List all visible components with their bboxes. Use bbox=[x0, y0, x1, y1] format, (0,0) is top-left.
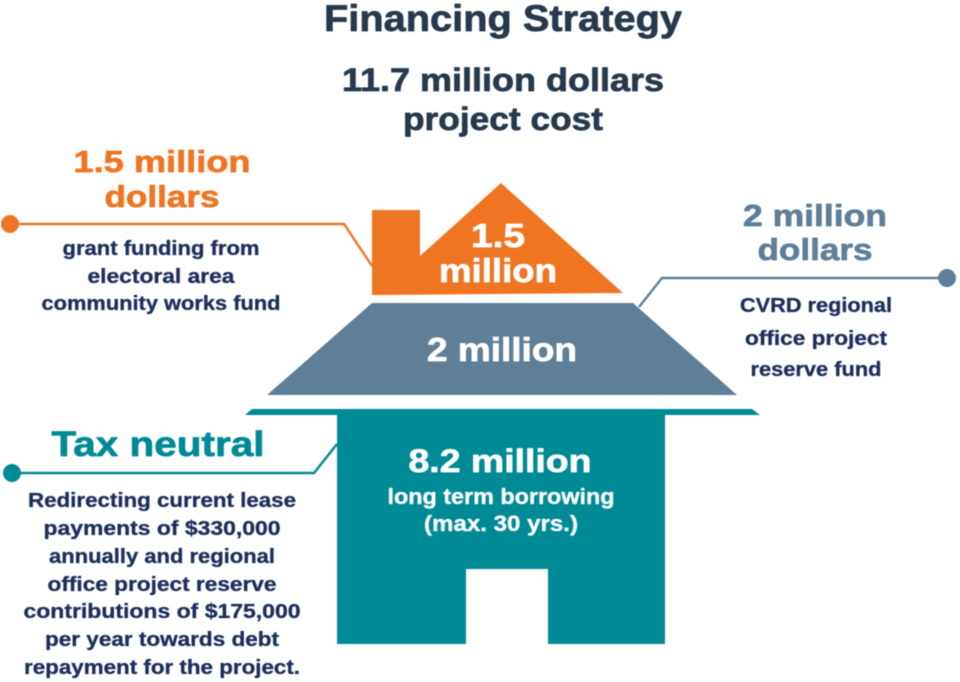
blue description: CVRD regional bbox=[740, 295, 892, 317]
orange description: grant funding from bbox=[62, 238, 260, 260]
orange amount bbox=[74, 144, 251, 214]
blue description: office project bbox=[745, 328, 887, 350]
roof top label: 1.5 bbox=[471, 217, 525, 254]
tax neutral description: contributions of $175,000 bbox=[24, 601, 300, 623]
body label: 8.2 million bbox=[408, 443, 592, 479]
callout: orange grant funding bbox=[1, 144, 372, 315]
blue amount bbox=[743, 198, 887, 267]
blue description: reserve fund bbox=[750, 359, 882, 381]
middle roof label: 2 million bbox=[427, 331, 577, 368]
orange description: electoral area bbox=[88, 266, 235, 288]
body label bbox=[388, 443, 614, 536]
orange amount: 1.5 million bbox=[74, 144, 251, 179]
tax neutral description bbox=[24, 490, 300, 679]
callout: blue reserve fund bbox=[639, 198, 956, 381]
project cost heading: project cost bbox=[403, 101, 603, 137]
blue amount: dollars bbox=[758, 232, 872, 267]
tax neutral description: office project reserve bbox=[48, 574, 276, 596]
tax neutral description: per year towards debt bbox=[45, 629, 279, 651]
orange description bbox=[42, 238, 280, 315]
orange leader line bbox=[1, 215, 372, 266]
tax neutral description: payments of $330,000 bbox=[44, 518, 280, 540]
tax neutral heading: Tax neutral bbox=[52, 425, 264, 464]
blue amount: 2 million bbox=[743, 198, 887, 233]
roof top label: million bbox=[439, 252, 557, 289]
teal leader line bbox=[3, 444, 337, 482]
blue description bbox=[740, 295, 892, 381]
tax neutral description: Redirecting current lease bbox=[28, 490, 296, 512]
tax neutral description: annually and regional bbox=[49, 546, 275, 568]
callout: tax neutral bbox=[3, 425, 337, 679]
house body: teal with door bbox=[245, 409, 760, 644]
tax neutral description: repayment for the project. bbox=[24, 657, 300, 679]
roof top label bbox=[439, 217, 557, 289]
project cost heading: 11.7 million dollars bbox=[342, 62, 664, 98]
body label: long term borrowing bbox=[388, 484, 614, 509]
blue leader line bbox=[639, 269, 956, 307]
orange amount: dollars bbox=[104, 179, 220, 214]
house middle roof: blue-grey bbox=[267, 303, 737, 395]
body label: (max. 30 yrs.) bbox=[424, 511, 578, 536]
house roof top: orange with chimney bbox=[372, 183, 623, 295]
orange description: community works fund bbox=[42, 293, 280, 315]
project cost heading bbox=[342, 62, 664, 137]
